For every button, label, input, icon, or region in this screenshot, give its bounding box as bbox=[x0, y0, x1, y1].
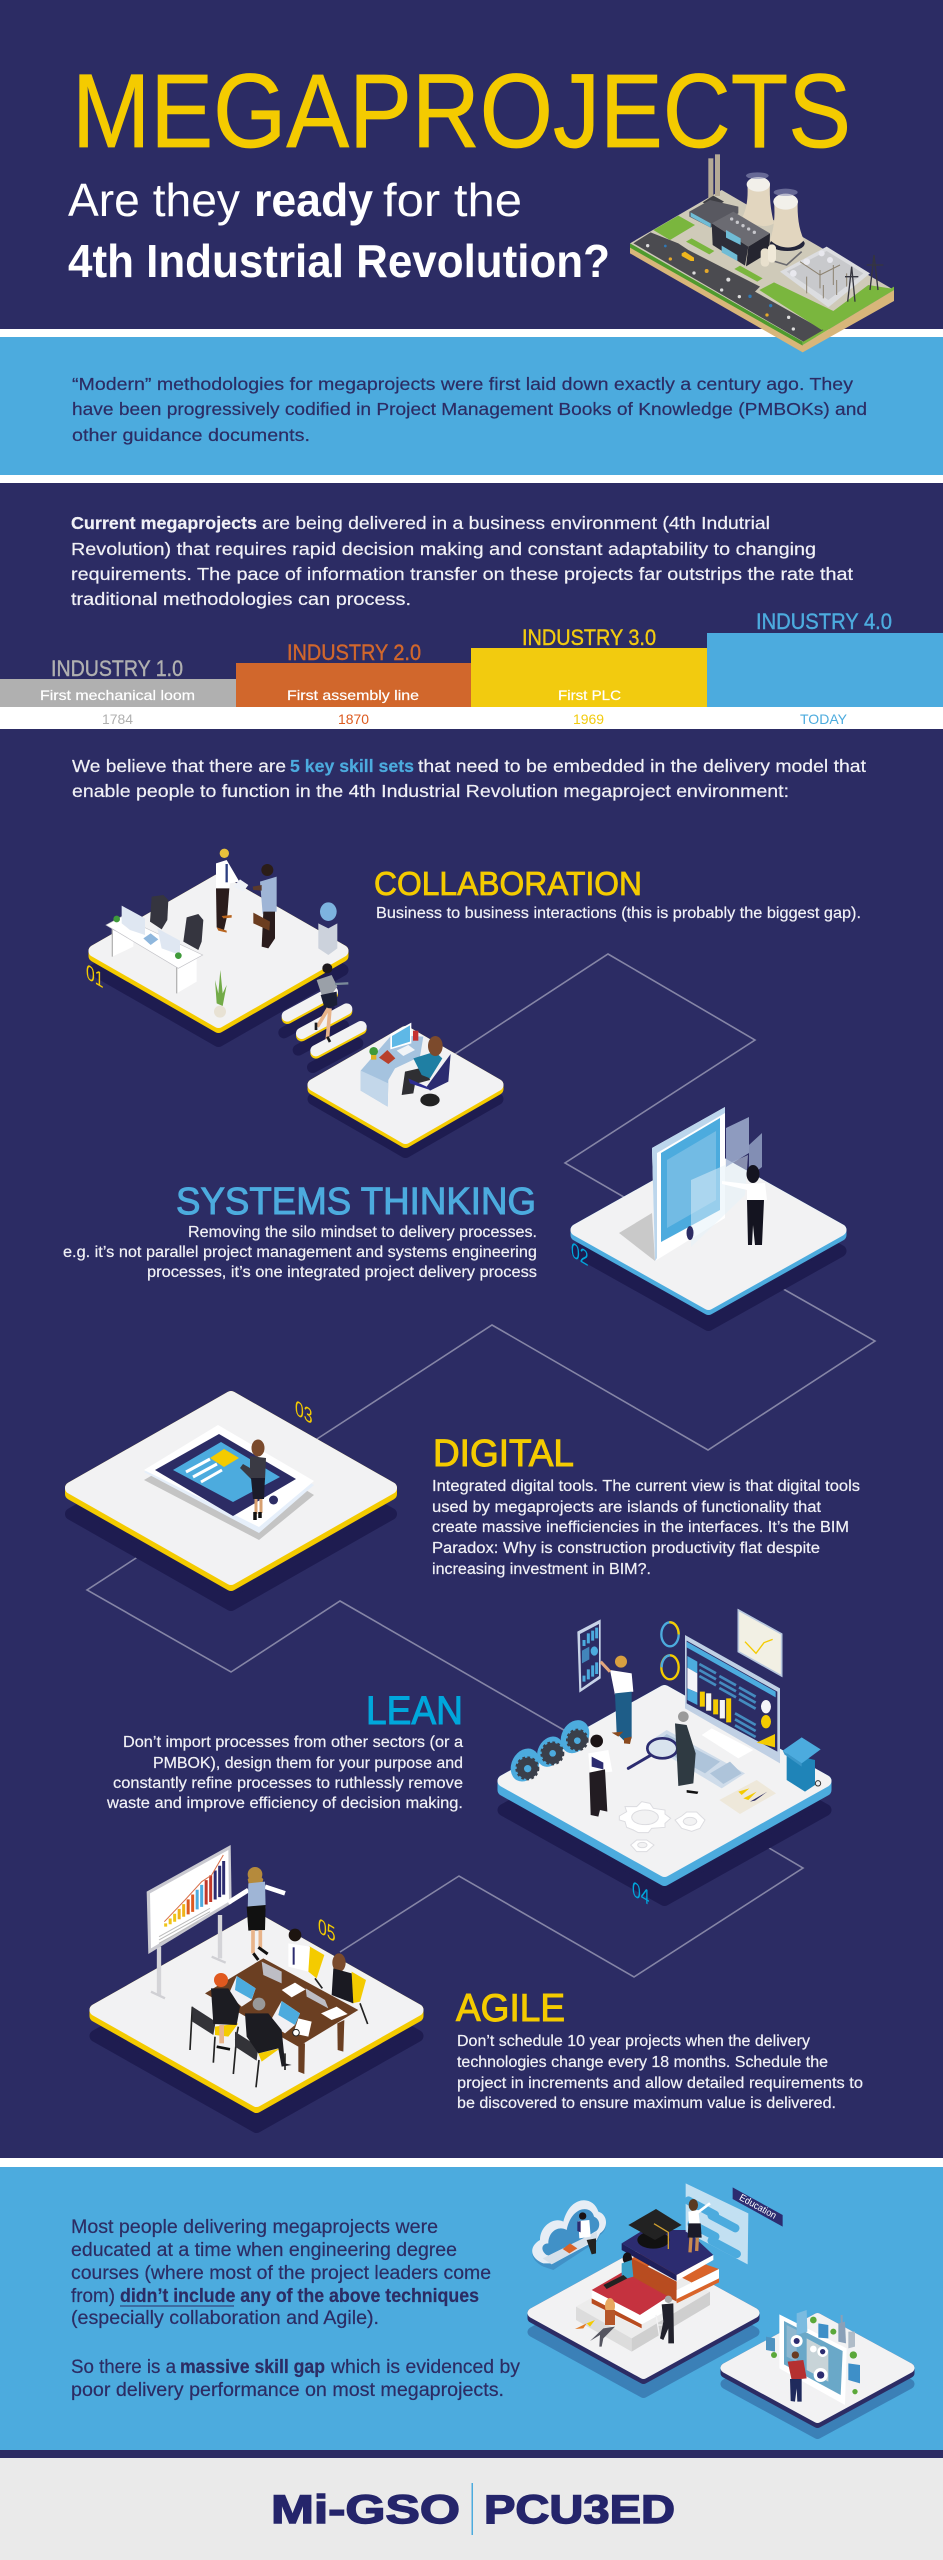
heading: lean: LEAN bbox=[366, 1689, 463, 1733]
number 01: 01 bbox=[86, 960, 104, 994]
subtitle: Are they bbox=[68, 174, 240, 226]
heading: agile: AGILE bbox=[456, 1987, 565, 2030]
platform: lean bbox=[504, 1691, 826, 1900]
text: systems thinking bbox=[63, 1224, 537, 1281]
text: agile: project in increments and allow detailed requirements to bbox=[457, 2075, 863, 2092]
text: systems thinking: processes, it’s one integrated project delivery process bbox=[147, 1264, 537, 1281]
key skill sets intro text: that need to be embedded in the delivery model that bbox=[418, 756, 866, 776]
platform: digital bbox=[71, 1397, 391, 1605]
title: MEGAPROJECTS bbox=[72, 53, 851, 170]
footer band bbox=[0, 2450, 943, 2458]
text: lean: constantly refine processes to ruthlessly remove bbox=[113, 1775, 463, 1792]
current megaprojects text bbox=[71, 513, 853, 609]
logo: Mi-GSO: Mi-GSO bbox=[271, 2488, 460, 2532]
text: digital: used by megaprojects are islands of functionality that bbox=[432, 1499, 822, 1516]
key skill sets intro text bbox=[72, 756, 866, 801]
text: skill gap conclusion: massive skill gap bbox=[180, 2357, 325, 2378]
timeline: industry 4.0: TODAY bbox=[800, 711, 848, 727]
heading: systems thinking: SYSTEMS THINKING bbox=[176, 1181, 536, 1223]
intro text: have been progressively codified in Project Management Books of Knowledge (PMBOKs) and bbox=[72, 399, 867, 419]
text: digital: increasing investment in BIM?. bbox=[432, 1561, 651, 1578]
text: education history: Most people delivering megaprojects were bbox=[71, 2217, 438, 2238]
intro text bbox=[72, 374, 867, 445]
platform: books bbox=[532, 2252, 754, 2393]
timeline: industry 1.0: 1784 bbox=[102, 711, 133, 727]
key skill sets intro text: enable people to function in the 4th Industrial Revolution megaproject environment: bbox=[72, 781, 789, 801]
platform: city bbox=[726, 2318, 910, 2434]
timeline: industry 3.0: 1969 bbox=[573, 711, 604, 727]
text: lean: PMBOK), design them for your purpose and bbox=[153, 1755, 463, 1772]
logo divider bbox=[472, 2483, 473, 2535]
icon: isometric power plant bbox=[630, 154, 894, 352]
text: education history: courses (where most of the project leaders come bbox=[71, 2263, 491, 2284]
text: education history: (especially collaboration and Agile). bbox=[71, 2308, 379, 2329]
timeline: industry 4.0 bbox=[707, 609, 943, 727]
timeline: industry 3.0: INDUSTRY 3.0 bbox=[522, 625, 656, 650]
text: skill gap conclusion: So there is a bbox=[71, 2357, 176, 2378]
timeline: industry 1.0: First mechanical loom bbox=[40, 687, 195, 703]
text: agile: be discovered to ensure maximum value is delivered. bbox=[457, 2095, 836, 2112]
tablet and figure bbox=[619, 1107, 767, 1261]
platform: collaboration second bbox=[314, 1032, 498, 1152]
text: education history: from) bbox=[71, 2286, 115, 2307]
text: education history: didn’t include any of the above techniques bbox=[120, 2286, 479, 2307]
number 02: 02 bbox=[571, 1238, 589, 1272]
intro text: other guidance documents. bbox=[72, 425, 310, 445]
desk and seated worker bbox=[361, 1023, 451, 1107]
panel: digital bbox=[71, 1396, 860, 1605]
number 03: 03 bbox=[295, 1396, 313, 1430]
tablet and figure bbox=[144, 1425, 314, 1540]
timeline: industry 3.0 bbox=[471, 625, 707, 727]
panel: lean bbox=[106, 1610, 826, 1911]
platform: agile bbox=[96, 1919, 418, 2127]
current megaprojects text: Current megaprojects bbox=[71, 513, 257, 533]
banner: education: Education bbox=[737, 2192, 778, 2222]
text: agile: Don’t schedule 10 year projects when the delivery bbox=[457, 2033, 810, 2050]
text: skill gap conclusion bbox=[71, 2357, 521, 2401]
heading: digital: DIGITAL bbox=[433, 1433, 574, 1475]
timeline: industry 1.0: INDUSTRY 1.0 bbox=[51, 656, 183, 681]
text: collaboration: Business to business interactions (this is probably the biggest gap). bbox=[376, 905, 861, 922]
text: lean bbox=[106, 1734, 463, 1812]
text: digital: Integrated digital tools. The current view is that digital tools bbox=[432, 1478, 860, 1495]
intro text: “Modern” methodologies for megaprojects were first laid down exactly a century ago. They bbox=[72, 374, 853, 394]
text: agile bbox=[457, 2033, 863, 2112]
current megaprojects text: Revolution) that requires rapid decision making and constant adaptability to changing bbox=[71, 539, 816, 559]
subtitle: 4th Industrial Revolution? bbox=[68, 235, 610, 287]
logo: PCU3ED: PCU3ED bbox=[484, 2488, 675, 2532]
text: systems thinking: Removing the silo mindset to delivery processes. bbox=[188, 1224, 537, 1241]
text: lean: waste and improve efficiency of decision making. bbox=[106, 1795, 463, 1812]
platform: systems thinking bbox=[576, 1156, 840, 1325]
timeline: industry 1.0 bbox=[0, 656, 236, 727]
current megaprojects text: are being delivered in a business environment (4th Indutrial bbox=[262, 513, 770, 533]
timeline: industry 2.0: 1870 bbox=[338, 711, 369, 727]
text: lean: Don’t import processes from other sectors (or a bbox=[123, 1734, 463, 1751]
dashboard, gears and figures bbox=[505, 1610, 821, 1852]
text: digital: create massive inefficiencies in the interfaces. It’s the BIM bbox=[432, 1519, 849, 1536]
panel: agile bbox=[96, 1845, 863, 2127]
timeline: industry 2.0: INDUSTRY 2.0 bbox=[287, 640, 421, 665]
text: agile: technologies change every 18 months. Schedule the bbox=[457, 2054, 828, 2071]
number 05: 05 bbox=[318, 1914, 336, 1948]
text: digital: Paradox: Why is construction productivity flat despite bbox=[432, 1540, 820, 1557]
panel: skill gap bbox=[71, 2183, 910, 2434]
text: education history: educated at a time when engineering degree bbox=[71, 2240, 457, 2261]
subtitle: ready bbox=[254, 174, 373, 226]
text: digital bbox=[432, 1478, 860, 1578]
timeline: industry 4.0: INDUSTRY 4.0 bbox=[756, 609, 892, 634]
text: education history bbox=[71, 2217, 491, 2329]
banner: education bbox=[733, 2187, 783, 2227]
panel: systems thinking bbox=[63, 1107, 840, 1325]
current megaprojects text: requirements. The pace of information transfer on these projects far outstrips the rate that bbox=[71, 564, 853, 584]
connector line bbox=[87, 954, 875, 1977]
timeline: industry 2.0 bbox=[236, 640, 471, 727]
timeline: industry 3.0: First PLC bbox=[558, 687, 621, 703]
key skill sets intro text: We believe that there are bbox=[72, 756, 286, 776]
subtitle: for the bbox=[383, 174, 522, 226]
panel: collaboration bbox=[86, 849, 861, 1152]
text: skill gap conclusion: which is evidenced by bbox=[330, 2357, 521, 2378]
text: systems thinking: e.g. it’s not parallel project management and systems engineering bbox=[63, 1244, 537, 1261]
heading: collaboration: COLLABORATION bbox=[374, 866, 642, 903]
key skill sets intro text: 5 key skill sets bbox=[290, 756, 414, 776]
current megaprojects text: traditional methodologies can process. bbox=[71, 589, 411, 609]
timeline: industry 2.0: First assembly line bbox=[287, 687, 419, 703]
whiteboard and meeting table bbox=[147, 1845, 368, 2087]
subtitle bbox=[68, 174, 610, 287]
icon: book stack, cloud and figures bbox=[532, 2183, 860, 2405]
stepping stones and office figures bbox=[106, 849, 361, 1067]
number 04: 04 bbox=[632, 1877, 650, 1911]
text: skill gap conclusion: poor delivery performance on most megaprojects. bbox=[71, 2380, 504, 2401]
platform: collaboration main bbox=[94, 880, 342, 1041]
